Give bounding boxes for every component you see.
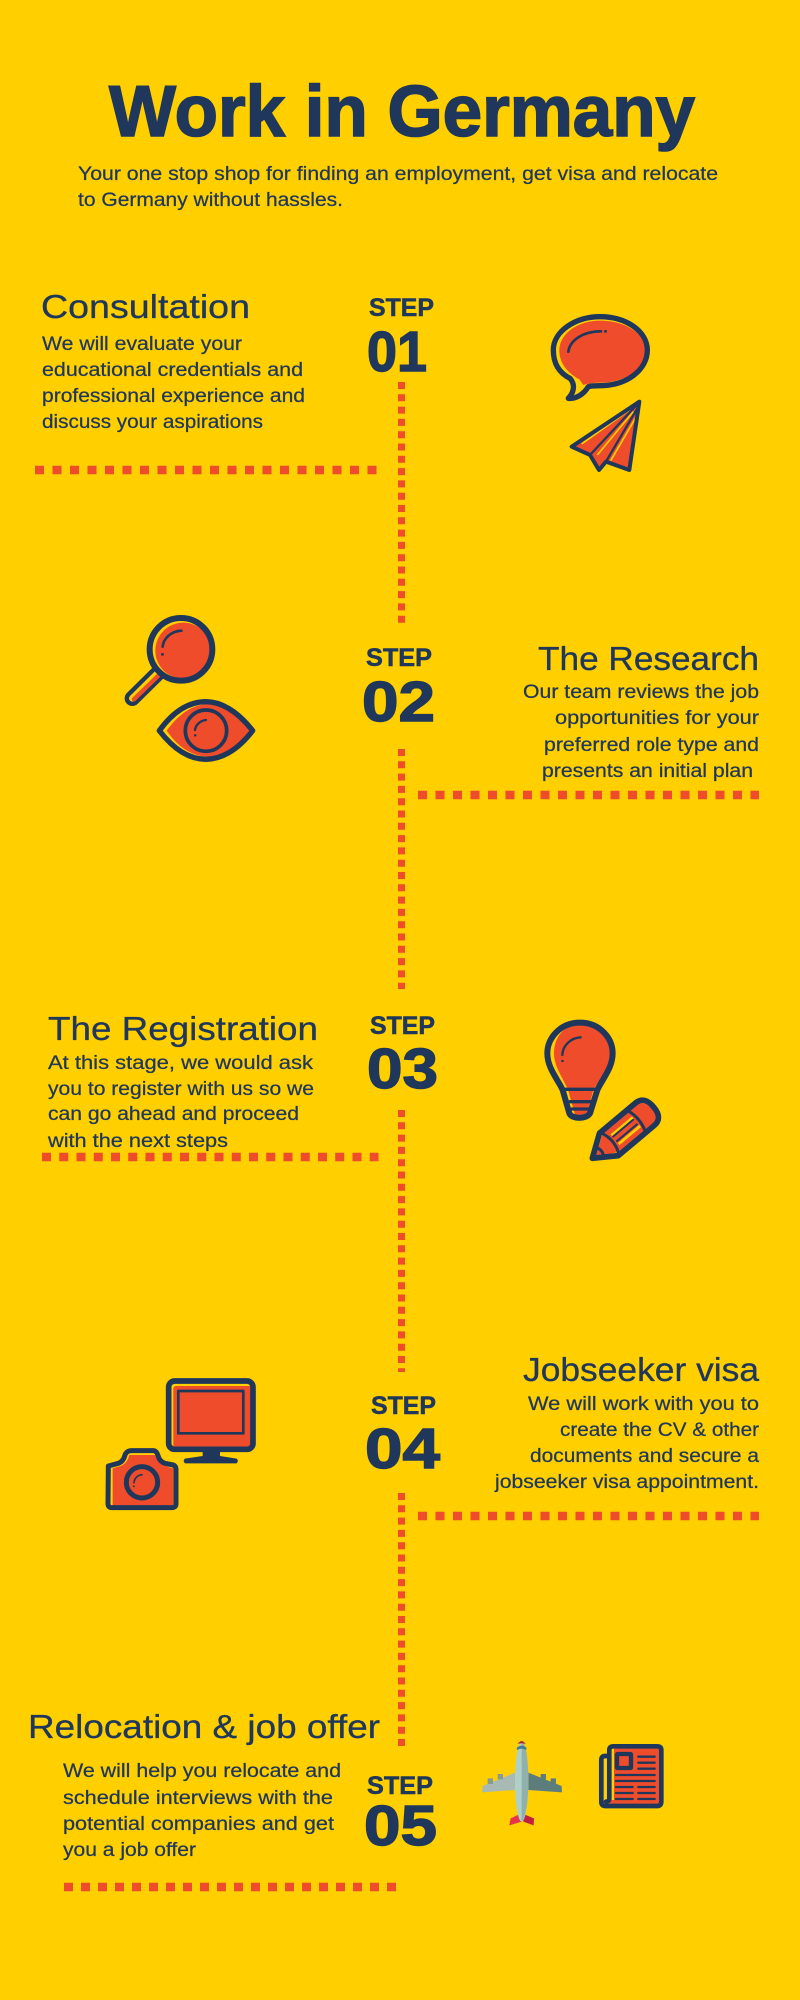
vertical connector 2 (398, 749, 405, 989)
step label 05: STEP (367, 1772, 433, 1800)
text block: registration description: with the next steps (47, 1131, 228, 1152)
text block: consultation description: discuss your aspirations (42, 412, 263, 433)
step label 01 (367, 294, 434, 384)
icon: airplane (482, 1741, 562, 1825)
step label 04 (365, 1392, 440, 1481)
step label 04: 04 (365, 1417, 440, 1481)
icon: camera (108, 1451, 176, 1508)
icon: speech bubble (553, 317, 647, 398)
panel: step 1 consultation (41, 288, 647, 470)
vertical connector 4 (398, 1493, 405, 1751)
heading: consultation: Consultation (41, 288, 250, 325)
text block: registration description: At this stage, we would ask (48, 1053, 314, 1074)
panel: step 2 research (132, 618, 760, 782)
icon: magnifying glass (132, 618, 212, 699)
text block: consultation description: educational credentials and (42, 360, 303, 381)
text block: research description: opportunities for your (555, 708, 760, 729)
step label 02 (362, 644, 435, 734)
heading: relocation and job offer: Relocation & job offer (28, 1708, 380, 1745)
text block: jobseeker visa description (494, 1394, 760, 1493)
text block: research description: preferred role type and (544, 735, 759, 756)
horizontal divider 4 (418, 1512, 759, 1520)
text block: registration description: you to register with us so we (48, 1079, 314, 1100)
subtitle: to Germany without hassles. (78, 189, 343, 211)
text block: registration description (47, 1053, 314, 1152)
step label 03 (367, 1012, 438, 1101)
text block: jobseeker visa description: jobseeker visa appointment. (494, 1472, 759, 1493)
subtitle: Your one stop shop for finding an employment, get visa and relocate (78, 163, 718, 185)
text block: relocation description: We will help you relocate and (63, 1761, 341, 1782)
step label 03: STEP (370, 1012, 435, 1040)
text block: research description: presents an initial plan (542, 761, 753, 782)
icon: monitor (169, 1381, 253, 1463)
heading: the research: The Research (538, 640, 759, 677)
vertical connector 1 (398, 382, 405, 623)
step label 01: STEP (369, 294, 434, 322)
horizontal divider 1 (35, 466, 377, 474)
step label 02: STEP (366, 644, 432, 672)
text block: jobseeker visa description: We will work with you to (528, 1394, 759, 1415)
icon: eye (159, 702, 253, 759)
text block: relocation description: schedule interviews with the (63, 1788, 333, 1809)
text block: registration description: can go ahead and proceed (48, 1104, 299, 1125)
text block: relocation description (63, 1761, 341, 1861)
step label 02: 02 (362, 670, 435, 734)
icon: newspaper (601, 1746, 662, 1806)
icon: pencil (583, 1096, 663, 1170)
text block: consultation description (42, 334, 305, 433)
panel: step 3 registration (47, 1010, 663, 1170)
horizontal divider 3 (42, 1153, 378, 1161)
subtitle (78, 163, 718, 211)
vertical connector 3 (398, 1110, 405, 1372)
step label 05: 05 (364, 1794, 437, 1858)
step label 05 (364, 1772, 437, 1858)
icon: light bulb (547, 1023, 613, 1118)
text block: relocation description: potential companies and get (63, 1814, 335, 1835)
step label 03: 03 (367, 1037, 438, 1101)
text block: consultation description: We will evaluate your (42, 334, 243, 355)
text block: relocation description: you a job offer (63, 1840, 197, 1861)
horizontal divider 5 (64, 1883, 396, 1891)
text block: consultation description: professional experience and (42, 386, 305, 407)
panel: step 5 relocation and job offer (28, 1708, 662, 1861)
step label 01: 01 (367, 320, 427, 384)
icon: paper plane (572, 402, 639, 470)
step label 04: STEP (371, 1392, 436, 1420)
text block: research description (523, 682, 760, 782)
heading: jobseeker visa: Jobseeker visa (523, 1351, 760, 1388)
heading: the registration: The Registration (48, 1010, 318, 1047)
text block: jobseeker visa description: documents and secure a (530, 1446, 759, 1467)
horizontal divider 2 (418, 791, 759, 799)
text block: research description: Our team reviews the job (523, 682, 759, 703)
text block: jobseeker visa description: create the CV & other (560, 1420, 760, 1441)
panel: step 4 jobseeker visa (108, 1351, 760, 1508)
title: Work in Germany (109, 72, 695, 152)
